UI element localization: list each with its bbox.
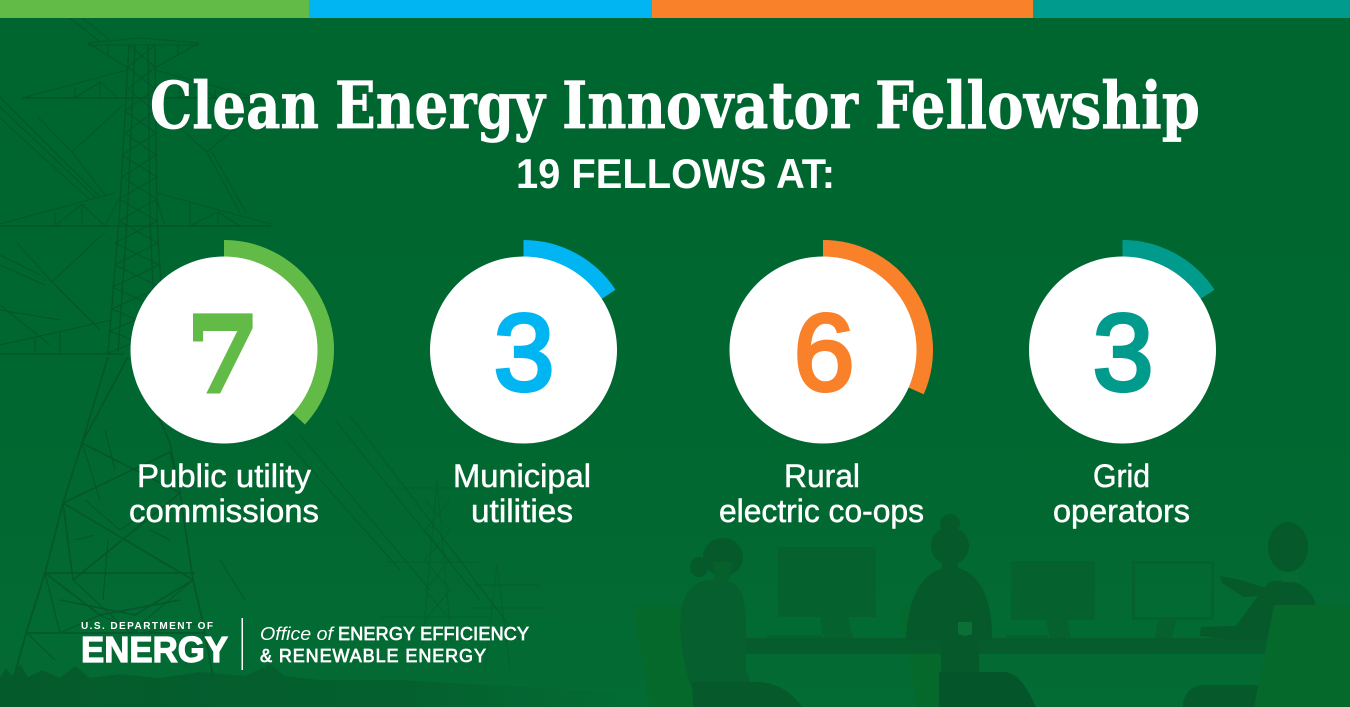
- monitor one: [767, 547, 876, 638]
- insulators and wires: [0, 97, 246, 345]
- department line: U.S. DEPARTMENT OF: [81, 621, 213, 632]
- label line 2: commissions: [129, 493, 319, 529]
- number circle: [1029, 256, 1216, 444]
- table: [740, 638, 1350, 654]
- divider: [242, 618, 243, 670]
- label: Grid: [1093, 458, 1150, 494]
- progress arc: 3 of 19: [1122, 249, 1207, 295]
- chair middle: [899, 605, 985, 707]
- office line 1 bold: ENERGY EFFICIENCY: [338, 624, 529, 644]
- background: grass line: [0, 664, 620, 707]
- lower legs: [13, 357, 213, 680]
- background: office scene: [632, 514, 1350, 707]
- number 3: 3: [1093, 292, 1153, 414]
- subtitle: 19 FELLOWS AT:: [516, 150, 835, 197]
- number circle: [430, 256, 617, 444]
- background: power transmission tower: [0, 18, 520, 680]
- panel: public utility commissions: [129, 249, 325, 529]
- person two: [906, 514, 1036, 707]
- label line 2: operators: [1053, 493, 1190, 529]
- background: distant towers: [380, 480, 545, 670]
- title: Energy: [335, 68, 547, 144]
- title: Innovator: [562, 68, 859, 144]
- chair left: [632, 605, 696, 707]
- label line 2: electric co-ops: [719, 493, 924, 529]
- monitor three: [1132, 561, 1214, 638]
- person three: [1183, 522, 1316, 707]
- lattice body: [108, 45, 165, 353]
- panel: grid operators: [1029, 249, 1216, 529]
- label: Municipal: [453, 458, 591, 494]
- progress arc: 3 of 19: [524, 249, 608, 295]
- panel: municipal utilities: [430, 249, 617, 529]
- title: Clean: [150, 68, 319, 144]
- energy wordmark: ENERGY: [81, 629, 228, 670]
- label line 2: utilities: [471, 493, 573, 529]
- number circle: [130, 256, 318, 444]
- progress arc: 7 of 19: [224, 249, 325, 418]
- office line 2: & RENEWABLE ENERGY: [260, 646, 486, 666]
- person one: [680, 538, 802, 707]
- monitor two: [1006, 561, 1095, 638]
- chair right: [1254, 605, 1350, 707]
- panel: rural electric co-ops: [719, 249, 924, 529]
- number 3: 3: [494, 292, 554, 414]
- logo: U.S. Department of Energy: [81, 618, 529, 670]
- top colour bar: [0, 0, 1350, 18]
- title: [150, 68, 1200, 144]
- number circle: [730, 256, 916, 444]
- label: Public utility: [137, 458, 311, 494]
- label: Rural: [784, 458, 860, 494]
- title: Fellowship: [875, 68, 1200, 144]
- progress arc: 6 of 19: [823, 249, 924, 391]
- number 7: 7: [186, 292, 260, 417]
- number 6: 6: [794, 292, 854, 414]
- office line 1: Office of: [260, 624, 335, 644]
